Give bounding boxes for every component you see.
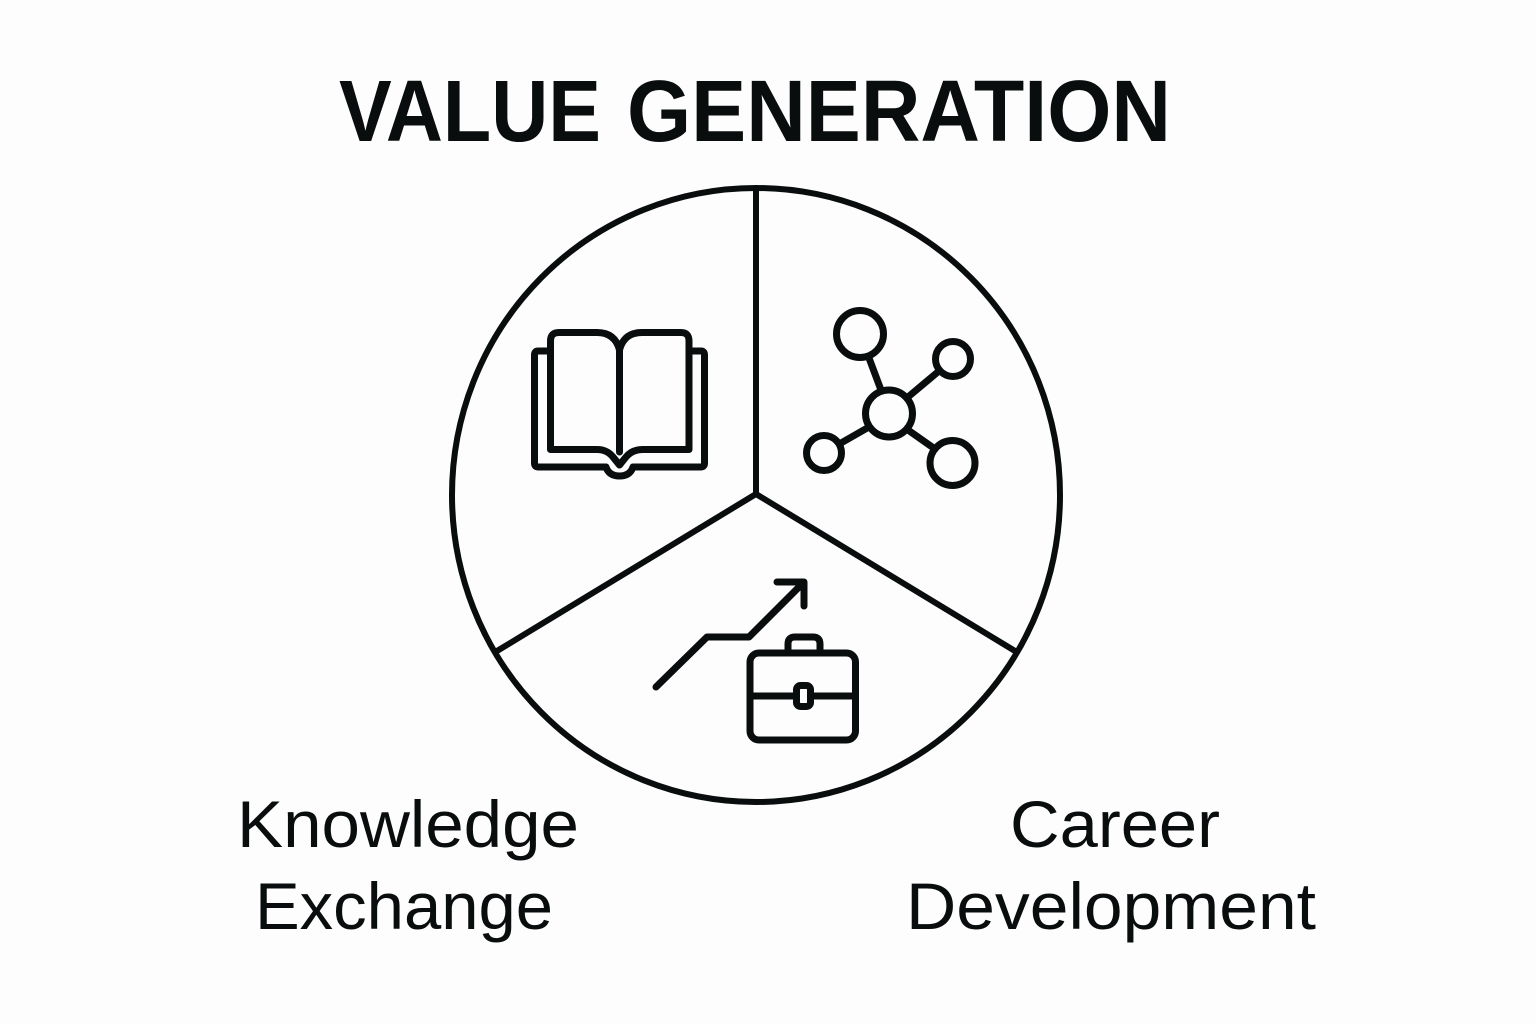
icon: open book [534, 332, 704, 476]
icon: briefcase [750, 637, 856, 740]
icon: growth arrow [656, 582, 804, 687]
title: GENERATION [627, 63, 1171, 160]
pie diagram [452, 188, 1060, 802]
label: career development [906, 787, 1316, 943]
label: career development: Career [1010, 787, 1220, 861]
icon: network nodes [806, 310, 975, 486]
segment dividers [497, 190, 1015, 651]
outer circle [452, 188, 1060, 802]
title [339, 63, 1171, 160]
label: knowledge exchange: Knowledge [237, 787, 579, 861]
label: knowledge exchange [237, 787, 579, 943]
title: VALUE [339, 63, 601, 160]
label: career development: Development [906, 869, 1316, 943]
label: knowledge exchange: Exchange [255, 869, 553, 943]
